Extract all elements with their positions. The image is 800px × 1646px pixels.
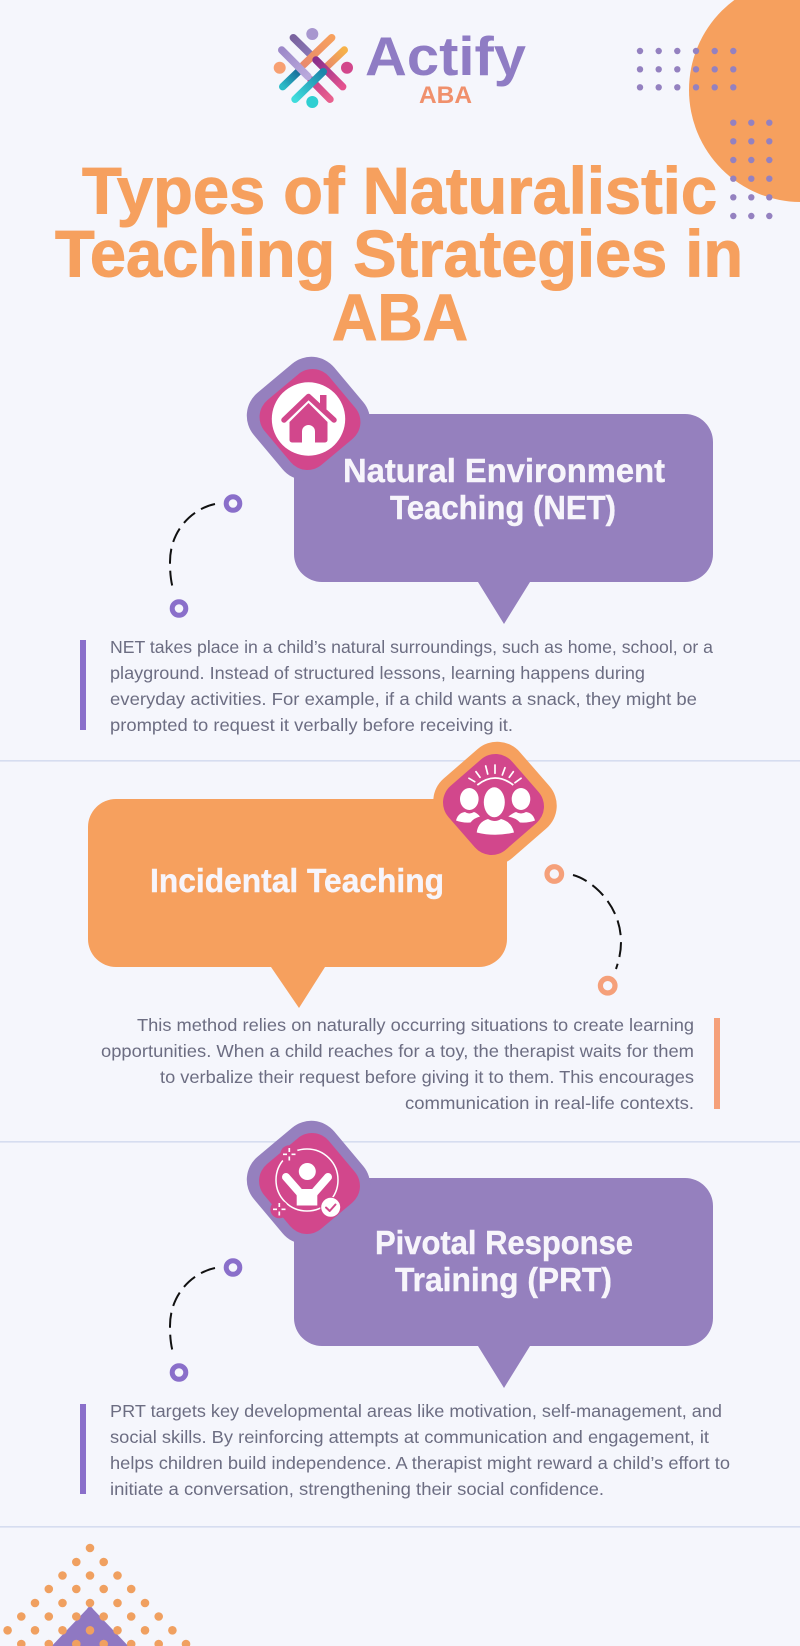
dot grid: top bbox=[637, 48, 736, 91]
title: Types of Naturalistic bbox=[82, 154, 717, 228]
panel: Incidental Teaching bbox=[88, 729, 720, 1113]
dashed arrow bbox=[170, 1261, 240, 1379]
divider bbox=[0, 1141, 800, 1143]
text block: playground. Instead of structured lessons, learning happens during bbox=[110, 663, 645, 683]
purple triangle bbox=[48, 1606, 132, 1646]
title: Teaching Strategies in bbox=[55, 217, 743, 291]
text block: to verbalize their request before giving it to them. This encourages bbox=[160, 1067, 694, 1087]
speech bubble bbox=[294, 1178, 713, 1388]
heading: Natural Environment bbox=[343, 452, 665, 489]
speech bubble bbox=[294, 414, 713, 624]
text block bbox=[110, 1401, 730, 1499]
logo icon bbox=[274, 28, 353, 108]
text block: communication in real-life contexts. bbox=[405, 1093, 694, 1113]
divider bbox=[0, 1526, 800, 1528]
diamond badge bbox=[235, 1109, 382, 1256]
text block: social skills. By reinforcing attempts at communication and engagement, it bbox=[110, 1427, 709, 1447]
decorative orange circle bbox=[689, 0, 800, 202]
text block: everyday activities. For example, if a child wants a snack, they might be bbox=[110, 689, 697, 709]
diamond badge inner bbox=[250, 1124, 369, 1243]
footer dotted triangle bbox=[3, 1544, 190, 1646]
heading: Teaching (NET) bbox=[390, 489, 616, 526]
orange dots bbox=[3, 1544, 190, 1646]
dashed arrow bbox=[547, 867, 621, 993]
title bbox=[55, 154, 743, 354]
icon: house bbox=[272, 382, 345, 456]
heading: Pivotal Response bbox=[375, 1224, 633, 1261]
text block bbox=[110, 637, 713, 735]
icon: group of people bbox=[456, 765, 535, 835]
heading bbox=[375, 1224, 633, 1298]
dot grid: right bbox=[730, 120, 772, 219]
heading: Incidental Teaching bbox=[150, 862, 444, 899]
accent bar bbox=[80, 640, 86, 730]
text block: NET takes place in a child’s natural surroundings, such as home, school, or a bbox=[110, 637, 713, 657]
diamond badge inner bbox=[251, 360, 369, 479]
text block: prompted to request it verbally before receiving it. bbox=[110, 715, 513, 735]
speech bubble bbox=[88, 799, 507, 1008]
logo bbox=[274, 25, 526, 109]
panel: Natural Environment Teaching bbox=[80, 345, 713, 735]
logo sub-label: ABA bbox=[419, 82, 472, 109]
title: ABA bbox=[332, 280, 468, 354]
text block bbox=[101, 1015, 694, 1113]
panel: Pivotal Response Training bbox=[80, 1109, 730, 1499]
icon: raised-arms person bbox=[270, 1145, 341, 1218]
accent bar bbox=[80, 1404, 86, 1494]
accent bar bbox=[714, 1018, 720, 1109]
logo wordmark: Actify bbox=[365, 25, 526, 87]
divider bbox=[0, 760, 800, 762]
dashed arrow bbox=[170, 497, 240, 615]
diamond badge inner bbox=[434, 745, 553, 864]
heading: Training (PRT) bbox=[395, 1261, 612, 1298]
text block: helps children build independence. A therapist might reward a child’s effort to bbox=[110, 1453, 730, 1473]
diamond badge bbox=[235, 345, 382, 492]
text block: initiate a conversation, strengthening their social confidence. bbox=[110, 1479, 604, 1499]
text block: This method relies on naturally occurring situations to create learning bbox=[137, 1015, 694, 1035]
diamond badge bbox=[421, 729, 569, 878]
heading bbox=[343, 452, 665, 526]
text block: opportunities. When a child reaches for a toy, the therapist waits for them bbox=[101, 1041, 694, 1061]
text block: PRT targets key developmental areas like motivation, self-management, and bbox=[110, 1401, 722, 1421]
